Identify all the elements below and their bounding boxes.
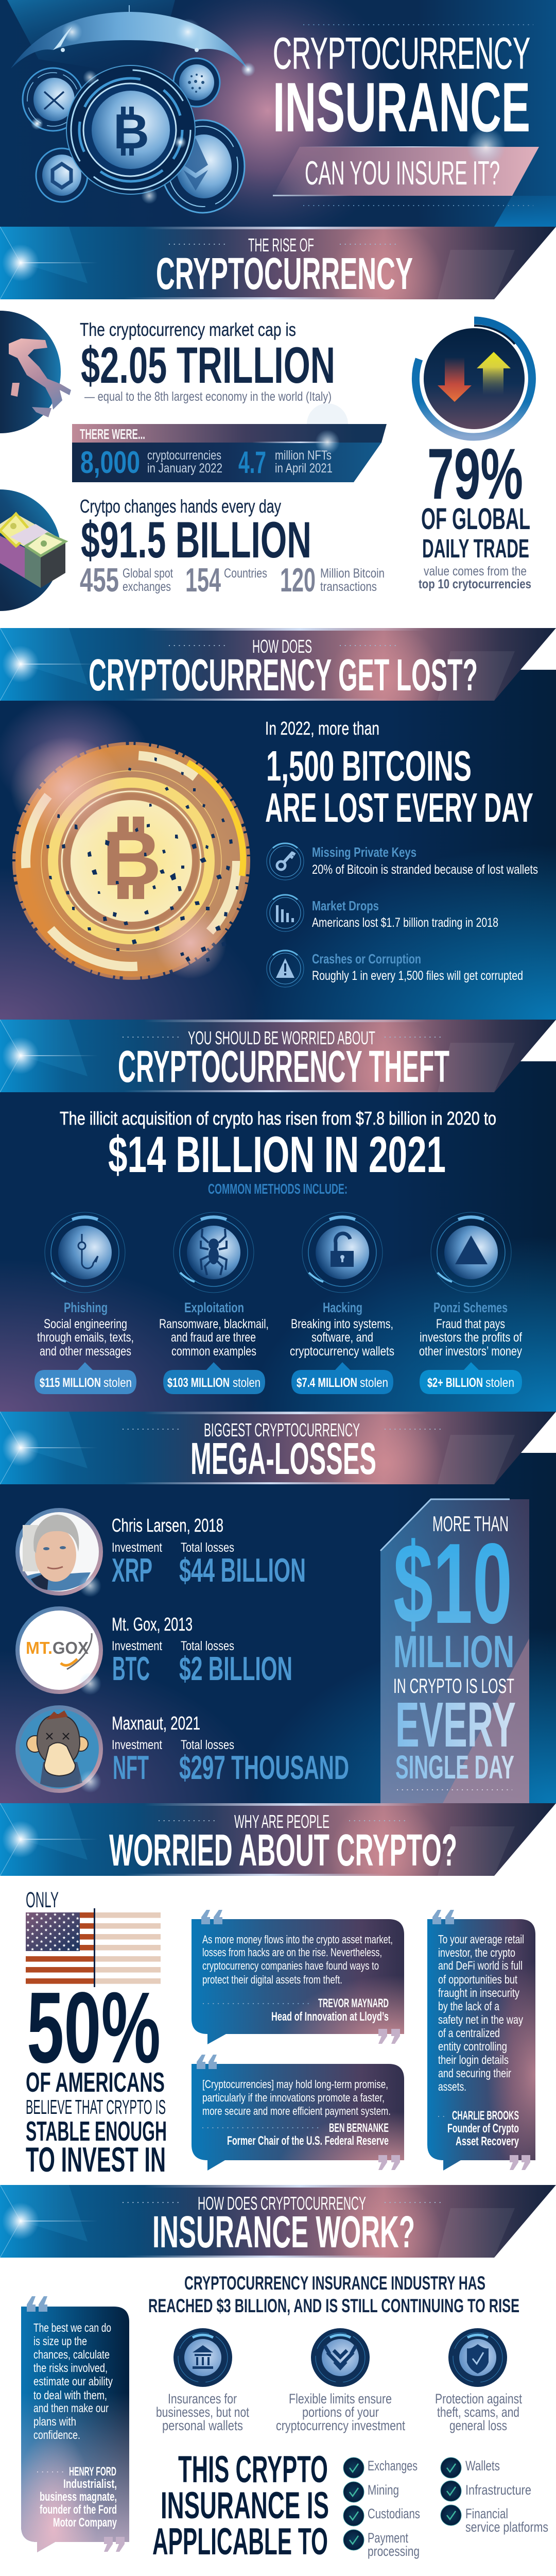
quote: Henry Ford: The best we can do: [33, 2321, 111, 2334]
logo: Mt. Gox: GOX: [53, 1638, 89, 1657]
text: daily volume: 455: [80, 561, 119, 599]
section banner: mega-losses: MEGA-LOSSES: [190, 1434, 376, 1484]
method: ponzi schemes: Ponzi Schemes: [433, 1300, 508, 1315]
section banner: why are people worried: [0, 1803, 556, 1876]
text: this crypto insurance is applicable to: [152, 2449, 329, 2563]
list item: crashes or corruption: Crashes or Corruption: [312, 951, 421, 967]
method: phishing: and other messages: [40, 1344, 131, 1359]
photo: Chris Larsen portrait: [15, 1508, 103, 1597]
quote: Charlie Brooks: investor, the crypto: [438, 1946, 515, 1959]
quote: Charlie Brooks: assets.: [438, 2080, 466, 2093]
quote: Charlie Brooks: of opportunities but: [438, 1973, 517, 1986]
text: daily volume: exchanges: [123, 580, 171, 594]
quote: Charlie Brooks: entity controlling: [438, 2040, 507, 2053]
quote: Charlie Brooks: their login details: [438, 2053, 509, 2066]
method: hacking: cryptocurrency wallets: [290, 1344, 394, 1359]
section banner: the rise of cryptocurrency: THE RISE OF: [248, 234, 314, 256]
stat pill: $7.4 MILLION: [297, 1376, 357, 1390]
quote: Henry Ford: to deal with them,: [33, 2388, 107, 2402]
icon: bank: [173, 2328, 232, 2387]
feature: flexible limits: Flexible limits ensure: [289, 2391, 392, 2406]
text: market cap: The cryptocurrency market cap is: [80, 319, 296, 340]
feature: protection: [435, 2328, 522, 2433]
panel: lost bitcoin background: [0, 670, 556, 1020]
quote: Trevor Maynard: As more money flows into the crypto asset market,: [202, 1933, 393, 1946]
text: 79 percent: [419, 433, 531, 591]
stat pill: stolen: [485, 1376, 514, 1390]
section banner: how does cryptocurrency get lost: HOW DOES: [252, 636, 312, 657]
text: daily volume: 120: [280, 561, 316, 599]
panel: there were: 8,000: [80, 445, 140, 480]
text: 50 percent statistic: TO INVEST IN: [26, 2140, 166, 2179]
list item: missing private keys: [267, 843, 538, 880]
icon: umbrella: [11, 5, 255, 77]
text: this crypto insurance is applicable to: THIS CRYPTO: [178, 2449, 328, 2490]
method: hacking: Hacking: [323, 1300, 362, 1315]
section banner: the rise of cryptocurrency: [0, 227, 556, 299]
quote: Charlie Brooks: and securing their: [438, 2066, 511, 2080]
text: daily volume: $91.5 BILLION: [81, 511, 311, 568]
method: ponzi schemes: other investors’ money: [419, 1344, 522, 1359]
loss: Mt. Gox: $2 BILLION: [179, 1650, 292, 1687]
feature: protection: theft, scams, and: [437, 2404, 519, 2420]
text: 1,500 bitcoins lost: [265, 718, 533, 831]
text: industry heading: [148, 2273, 519, 2316]
checklist: applicable entities: Wallets: [465, 2458, 500, 2473]
feature: business insurance: [156, 2328, 249, 2433]
illustration: shattered bitcoin: B: [102, 815, 162, 902]
text: daily volume: Crytpo changes hands every day: [80, 496, 281, 517]
icon: pyramid: [431, 1212, 511, 1293]
method: exploitation: common examples: [171, 1344, 256, 1359]
text: 50 percent statistic: [26, 1971, 167, 2179]
quote: Henry Ford: [21, 2296, 129, 2552]
text: 79 percent: top 10 crytocurrencies: [419, 577, 531, 591]
loss: Chris Larsen: Investment: [112, 1540, 162, 1555]
quote: Trevor Maynard: cryptocurrency companies have found ways to: [202, 1959, 379, 1972]
quote: Charlie Brooks: and DeFi world is full: [438, 1959, 523, 1972]
list item: market drops: Market Drops: [312, 898, 379, 913]
feature: flexible limits: cryptocurrency investment: [276, 2418, 405, 2433]
quote: Ben Bernanke: [192, 2055, 404, 2171]
quote: Henry Ford: Motor Company: [53, 2516, 117, 2530]
quote: Henry Ford: business magnate,: [40, 2490, 117, 2504]
section banner: mega-losses: [0, 1412, 556, 1484]
loss: Maxnaut: Total losses: [181, 1738, 234, 1752]
text: daily volume: Global spot: [123, 566, 173, 581]
icon: Bitcoin coin: [31, 65, 195, 204]
panel: mega-losses background: [0, 1453, 556, 1803]
panel: market cap: [0, 311, 387, 482]
list item: market drops: [267, 894, 498, 931]
icon: handshake: [311, 2328, 370, 2387]
panel: there were: in April 2021: [275, 461, 333, 476]
method: hacking: [290, 1212, 394, 1394]
loss: Mt. Gox: Total losses: [181, 1639, 234, 1653]
method: hacking: Breaking into systems,: [291, 1317, 393, 1331]
stat pill: stolen: [360, 1376, 388, 1390]
icon: broken padlock: [302, 1212, 383, 1293]
title: [273, 29, 530, 146]
quote: Henry Ford: chances, calculate: [33, 2348, 110, 2361]
stat pill: [34, 1362, 136, 1394]
method: phishing: Phishing: [64, 1300, 108, 1315]
loss: Chris Larsen: [15, 1508, 306, 1597]
section banner: cryptocurrency theft: [0, 1020, 556, 1092]
text: 50 percent statistic: BELIEVE THAT CRYPTO IS: [26, 2096, 166, 2119]
feature: protection: Protection against: [435, 2391, 522, 2406]
quote: Trevor Maynard: losses from hacks are on the rise. Nevertheless,: [202, 1946, 382, 1959]
quote: Trevor Maynard: protect their digital assets from theft.: [202, 1973, 342, 1986]
section banner: how does insurance work: [0, 2185, 556, 2258]
panel: 50 percent of Americans: [26, 1888, 167, 2179]
section banner: how does insurance work: HOW DOES CRYPTOCURRENCY: [198, 2193, 366, 2214]
quote: Henry Ford: plans with: [33, 2415, 76, 2428]
checklist: applicable entities: Custodians: [368, 2506, 420, 2521]
quote: Trevor Maynard: Head of Innovation at Lloyd’s: [271, 2010, 389, 2024]
text: this crypto insurance is applicable to: APPLICABLE TO: [152, 2521, 328, 2563]
text: daily volume: transactions: [320, 580, 377, 594]
icon: up and down arrows: [415, 320, 532, 437]
checklist: applicable entities: Exchanges: [368, 2458, 418, 2473]
panel: theft background: [0, 1061, 556, 1412]
logo: Mt. Gox: MT.: [26, 1638, 53, 1657]
stat pill: $2+ BILLION: [427, 1376, 483, 1390]
feature: flexible limits: [276, 2328, 405, 2433]
callout: $10 million lost every day: [380, 1499, 529, 1803]
section banner: cryptocurrency theft: YOU SHOULD BE WORRIED ABOUT: [188, 1027, 375, 1048]
icon: key: [267, 843, 304, 880]
stat pill: $103 MILLION: [167, 1376, 230, 1390]
quote: Henry Ford: founder of the Ford: [40, 2503, 117, 2517]
loss: Maxnaut: Maxnaut, 2021: [112, 1713, 200, 1734]
panel: daily trade: [415, 320, 532, 591]
list item: crashes or corruption: [267, 950, 523, 987]
text: this crypto insurance is applicable to: INSURANCE IS: [161, 2485, 329, 2527]
method: ponzi schemes: investors the profits of: [420, 1330, 522, 1345]
quote: Ben Bernanke: BEN BERNANKE: [329, 2121, 389, 2135]
quote: Henry Ford: is size up the: [33, 2334, 87, 2348]
loss: Mt. Gox: [15, 1606, 292, 1695]
panel: there were: million NFTs: [275, 448, 332, 463]
quote: Charlie Brooks: safety net in the way: [438, 2013, 523, 2026]
list item: missing private keys: Missing Private Keys: [312, 844, 416, 860]
stat pill: $115 MILLION: [40, 1376, 101, 1390]
method: exploitation: and fraud are three: [171, 1330, 256, 1345]
method: exploitation: Exploitation: [184, 1300, 244, 1315]
method: phishing: Social engineering: [44, 1317, 127, 1331]
method: ponzi schemes: [419, 1212, 522, 1394]
icon: warning triangle: [267, 950, 304, 987]
quote: Charlie Brooks: fraught in insecurity: [438, 1986, 519, 1999]
panel: there were: 4.7: [238, 445, 266, 480]
loss: Chris Larsen: $44 BILLION: [179, 1551, 306, 1589]
checklist: applicable entities: processing: [368, 2544, 420, 2559]
quote: Ben Bernanke: more secure and more efficient payment system.: [202, 2105, 391, 2117]
quote: Charlie Brooks: by the lack of a: [438, 1999, 499, 2013]
checklist: applicable entities: Mining: [368, 2482, 399, 2498]
icon: Italy globe: [0, 311, 71, 433]
quote: Henry Ford: Industrialist,: [63, 2477, 117, 2491]
text: 1,500 bitcoins lost: In 2022, more than: [265, 718, 379, 739]
panel: there were: in January 2022: [147, 461, 222, 476]
text: daily volume: 154: [185, 561, 221, 599]
stat pill: [420, 1362, 522, 1394]
text: 50 percent statistic: OF AMERICANS: [26, 2067, 165, 2098]
icon: falling bar chart: [267, 894, 304, 931]
panel: 50 percent of Americans: ONLY: [26, 1888, 59, 1912]
panel: daily volume: [0, 489, 385, 611]
quote: Ben Bernanke: [Cryptocurrencies] may hold long-term promise,: [202, 2078, 388, 2091]
stat pill: [291, 1362, 393, 1394]
quote: Trevor Maynard: [192, 1910, 404, 2044]
illustration: shattered bitcoin: [10, 737, 248, 979]
icon: shield with check: [448, 2328, 507, 2387]
panel: there were: [72, 403, 387, 482]
feature: business insurance: businesses, but not: [156, 2404, 249, 2420]
feature: business insurance: personal wallets: [162, 2418, 243, 2433]
icon: Chainlink coin: [36, 148, 88, 202]
panel: there were: cryptocurrencies: [147, 448, 221, 463]
text: market cap: [80, 319, 335, 404]
quote: Ben Bernanke: particularly if the innovations promote a faster,: [202, 2091, 385, 2104]
method: ponzi schemes: Fraud that pays: [436, 1317, 505, 1331]
checklist: applicable entities: Financial: [465, 2506, 508, 2521]
icon: bored ape NFT: [15, 1705, 103, 1793]
section banner: how does cryptocurrency get lost: [0, 628, 556, 701]
quote: Ben Bernanke: Former Chair of the U.S. Federal Reserve: [227, 2134, 389, 2148]
section banner: why are people worried: WHY ARE PEOPLE: [234, 1811, 329, 1832]
loss: Maxnaut: NFT: [113, 1749, 149, 1786]
text: 50 percent statistic: STABLE ENOUGH: [26, 2116, 167, 2147]
loss: Maxnaut: $297 THOUSAND: [179, 1749, 349, 1786]
loss: Maxnaut: Investment: [112, 1738, 162, 1752]
quote: Henry Ford: confidence.: [33, 2428, 80, 2442]
stat pill: stolen: [103, 1376, 132, 1390]
text: theft statistic: COMMON METHODS INCLUDE:: [208, 1181, 348, 1197]
text: theft statistic: [60, 1108, 496, 1197]
method: phishing: [34, 1212, 136, 1394]
loss: Mt. Gox: Mt. Gox, 2013: [112, 1614, 193, 1635]
loss: Chris Larsen: Chris Larsen, 2018: [112, 1515, 223, 1536]
text: daily volume: Countries: [224, 566, 267, 581]
loss: Chris Larsen: XRP: [112, 1551, 152, 1589]
feature: business insurance: Insurances for: [168, 2391, 237, 2406]
quote: Henry Ford: estimate our ability: [33, 2375, 113, 2388]
icon: fish hook: [45, 1212, 125, 1293]
quote: Charlie Brooks: Asset Recovery: [456, 2134, 519, 2148]
method: hacking: software, and: [311, 1330, 373, 1345]
text: daily volume: Million Bitcoin: [320, 566, 385, 581]
section banner: mega-losses: BIGGEST CRYPTOCURRENCY: [204, 1419, 360, 1440]
quote: Henry Ford: the risks involved,: [33, 2361, 108, 2375]
quote: Charlie Brooks: Founder of Crypto: [447, 2122, 519, 2136]
checklist: applicable entities: [343, 2458, 548, 2559]
text: market cap: $2.05 TRILLION: [81, 336, 335, 394]
quote: Charlie Brooks: of a centralized: [438, 2026, 500, 2040]
quote: Trevor Maynard: TREVOR MAYNARD: [318, 1996, 389, 2010]
quote: Charlie Brooks: To your average retail: [438, 1933, 524, 1946]
panel: there were: THERE WERE...: [80, 426, 145, 442]
feature: protection: general loss: [449, 2418, 507, 2433]
loss: Maxnaut: [15, 1705, 349, 1793]
quote: Henry Ford: HENRY FORD: [69, 2465, 116, 2479]
logo: Mt. Gox: [15, 1606, 103, 1695]
icon: Bitcoin coin: B: [113, 104, 149, 159]
text: daily volume: [80, 496, 385, 599]
quote: Charlie Brooks: [427, 1910, 535, 2171]
checklist: applicable entities: Infrastructure: [465, 2482, 531, 2498]
icon: money stack: [0, 489, 65, 611]
method: phishing: through emails, texts,: [37, 1330, 134, 1345]
text: 50 percent statistic: 50%: [27, 1971, 161, 2084]
text: market cap: — equal to the 8th largest economy in the world (Italy): [84, 389, 332, 404]
subtitle banner: [273, 127, 539, 196]
list item: market drops: Americans lost $1.7 billion trading in 2018: [312, 916, 498, 930]
loss: Mt. Gox: BTC: [112, 1650, 150, 1687]
method: exploitation: [159, 1212, 269, 1394]
loss: Chris Larsen: Total losses: [181, 1540, 234, 1555]
icon: spider: [173, 1212, 254, 1293]
checklist: applicable entities: Payment: [368, 2530, 408, 2546]
icon: XRP coin: [23, 68, 83, 131]
icon: Ethereum coin: [161, 120, 245, 213]
feature: flexible limits: portions of your: [302, 2404, 379, 2420]
panel: hero header: [0, 0, 556, 227]
loss: Mt. Gox: Investment: [112, 1639, 162, 1653]
icon: Cardano coin: [173, 58, 220, 107]
stat pill: [163, 1362, 265, 1394]
method: exploitation: Ransomware, blackmail,: [159, 1317, 269, 1331]
quote: Henry Ford: and then make our: [33, 2401, 109, 2415]
text: 79 percent: value comes from the: [424, 564, 527, 579]
stat pill: stolen: [233, 1376, 260, 1390]
icon: half-filled American flag: [26, 1908, 161, 1987]
